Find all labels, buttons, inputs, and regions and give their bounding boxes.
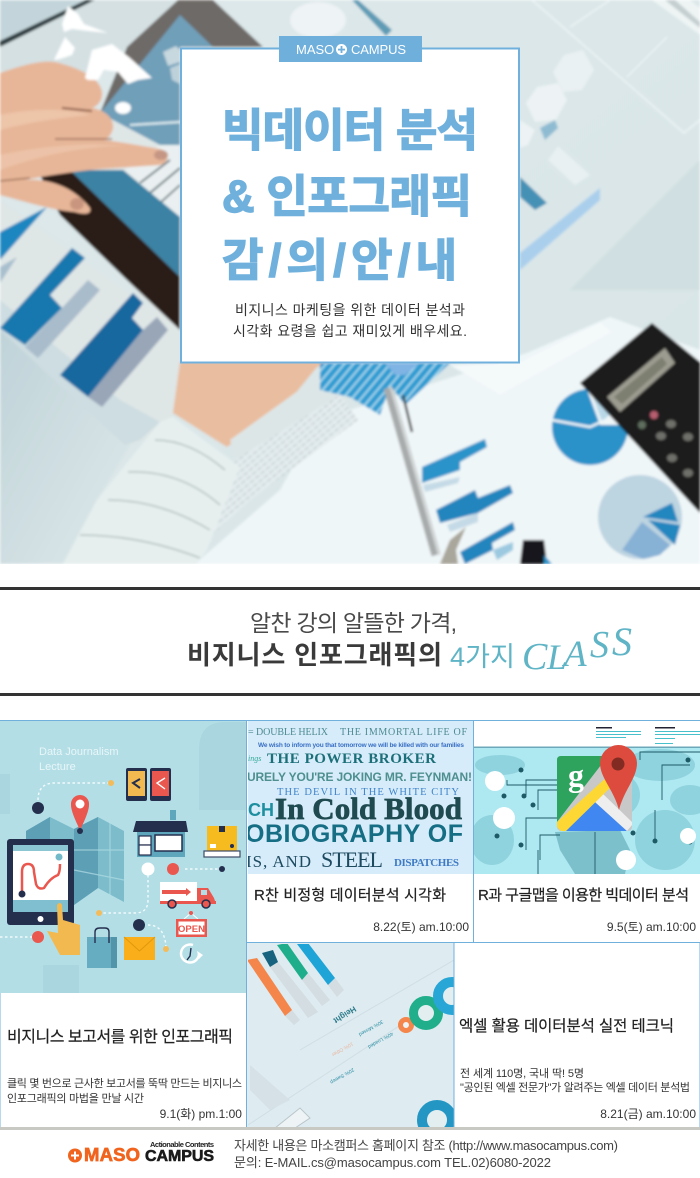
icon: shopping bag: [87, 928, 117, 968]
tablet: [100, 0, 264, 112]
class date: 8.21(금) am.10:00: [600, 1107, 696, 1121]
hero photo: hand, tablet and charts on a desk: [0, 0, 700, 564]
icon: open sign: OPEN: [178, 924, 205, 935]
class date: 9.1(화) pm.1:00: [160, 1107, 242, 1121]
icon: house: [133, 810, 188, 857]
pies: [552, 389, 628, 465]
book titles typography image: In Cold Blood: [275, 791, 462, 826]
main heading: & 인포그래픽: [222, 171, 472, 222]
top-right desk sheets: [532, 0, 700, 133]
infographic photo: 10% Other: [330, 1040, 354, 1058]
brand tag: MASO: [296, 42, 334, 57]
logo: MASO CAMPUS: [68, 1140, 214, 1165]
icon: google maps: [557, 745, 637, 831]
icon: envelope: [124, 937, 155, 960]
logo: MASO CAMPUS: Actionable Contents: [150, 1140, 214, 1149]
infographic photo: 40% Loaded: [366, 1030, 394, 1050]
book titles typography image: = DOUBLE HELIX: [248, 727, 329, 738]
illustration: data journalism: Data Journalism: [39, 746, 118, 758]
panel: R unstructured data visualization: [245, 720, 474, 942]
striped bar chart: [320, 363, 450, 415]
icon: delivery truck: [160, 882, 216, 908]
book titles typography image: THE POWER BROKER: [267, 751, 436, 767]
subheading: [233, 302, 467, 339]
book titles typography image: URELY YOU'RE JOKING MR. FEYNMAN!: [247, 770, 472, 784]
icon: package on pallet: [204, 826, 240, 857]
icon: folded map: [26, 817, 124, 905]
icon: clock: [181, 944, 203, 962]
calculator: [580, 323, 700, 513]
book titles typography image: THE IMMORTAL LIFE OF: [340, 727, 467, 738]
lower-right sheets: [195, 317, 700, 564]
infographic photo: Height: [332, 1004, 358, 1025]
book titles typography image: We wish to inform you that tomorrow we will be killed with our families: [258, 742, 464, 749]
illustration: data journalism: Lecture: [39, 761, 76, 773]
book titles typography image: THE DEVIL IN THE WHITE CITY: [277, 787, 459, 798]
infographic photo: 30% Missed: [357, 1018, 384, 1037]
section header: four classes: [0, 587, 700, 696]
book titles typography image: CH: [248, 800, 274, 820]
world map overlay: [54, 6, 152, 114]
contact information: 문의: E-MAIL.cs@masocampus.com TEL.02)6080-2022: [234, 1155, 551, 1170]
logo: MASO CAMPUS: CAMPUS: [145, 1148, 214, 1165]
blue bars on the tablet sheet: [0, 207, 47, 260]
panel: infographic class: [0, 720, 246, 1128]
icon: open sign: [176, 911, 207, 937]
class title: R과 구글맵을 이용한 빅데이터 분석: [478, 887, 689, 904]
map infographic image: [470, 727, 700, 874]
icon: google maps: g: [568, 757, 584, 793]
footer: [0, 1127, 700, 1170]
script word: S: [590, 624, 609, 666]
script word: [522, 619, 632, 678]
wrist and sleeve: [173, 362, 330, 447]
illustration: data journalism: [0, 721, 246, 993]
class description: [7, 1077, 242, 1105]
hexagons: [553, 50, 594, 92]
pen: [388, 388, 436, 555]
panel: Excel image: [247, 943, 454, 1127]
main heading: 빅데이터 분석: [222, 105, 478, 156]
book titles typography image: OBIOGRAPHY OF: [245, 820, 463, 848]
class description: 전 세계 110명, 국내 딱! 5명: [460, 1067, 584, 1080]
contact information: [234, 1138, 618, 1170]
icon: phones: [126, 768, 171, 801]
class description: [460, 1067, 690, 1094]
main heading: 감/의/안/내: [222, 235, 457, 286]
logo: MASO CAMPUS: MASO: [84, 1144, 140, 1165]
title card: [181, 36, 519, 362]
icon: location pin: [71, 795, 89, 834]
book titles typography image: STEEL: [321, 847, 383, 872]
class description: 클릭 몇 번으로 근사한 보고서를 뚝딱 만드는 비지니스: [7, 1077, 242, 1090]
infographic photo: 20% Sweep: [329, 1066, 355, 1085]
panel: Excel class: [454, 942, 700, 1128]
contact information: 자세한 내용은 마소캠퍼스 홈페이지 참조 (http://www.masocampus.com): [234, 1138, 618, 1153]
brand tag: [279, 36, 422, 62]
subheading: 비지니스 마케팅을 위한 데이터 분석과: [235, 302, 465, 318]
center bars: [422, 439, 487, 483]
script word: S: [612, 619, 632, 664]
section header: four classes: 알찬 강의 알뜰한 가격,: [250, 610, 457, 636]
section header: four classes: 비지니스 인포그래픽의: [187, 640, 442, 670]
class title: 엑셀 활용 데이터분석 실전 테크닉: [459, 1017, 674, 1035]
class description: "공인된 엑셀 전문가"가 알려주는 엑셀 데이터 분석법: [460, 1080, 690, 1094]
book titles typography image: IS, AND: [246, 852, 311, 871]
top desk items above the card: [290, 2, 346, 38]
class title: 비지니스 보고서를 위한 인포그래픽: [7, 1028, 233, 1046]
class description: 인포그래픽의 마법을 만날 시간: [7, 1092, 144, 1105]
class title: R찬 비정형 데이터분석 시각화: [254, 887, 446, 904]
hand: [0, 62, 168, 214]
brand tag: CAMPUS: [351, 42, 406, 57]
class date: 8.22(토) am.10:00: [373, 920, 469, 934]
subheading: 시각화 요령을 쉽고 재미있게 배우세요.: [233, 323, 467, 339]
icon: tablet with route: [7, 839, 74, 925]
book titles typography image: ings: [248, 754, 261, 763]
script word: A: [561, 634, 587, 675]
script word: C: [522, 636, 548, 678]
main heading: [222, 105, 478, 286]
script word: L: [546, 637, 567, 677]
panel: R and Google Maps: [470, 720, 700, 942]
book titles typography image: [245, 721, 473, 874]
section header: four classes: 4가지: [450, 642, 515, 672]
infographic photo: [248, 944, 454, 1127]
book titles typography image: DISPATCHES: [394, 857, 459, 869]
class date: 9.5(토) am.10:00: [607, 920, 696, 934]
icon: pointing hand: [47, 903, 80, 955]
